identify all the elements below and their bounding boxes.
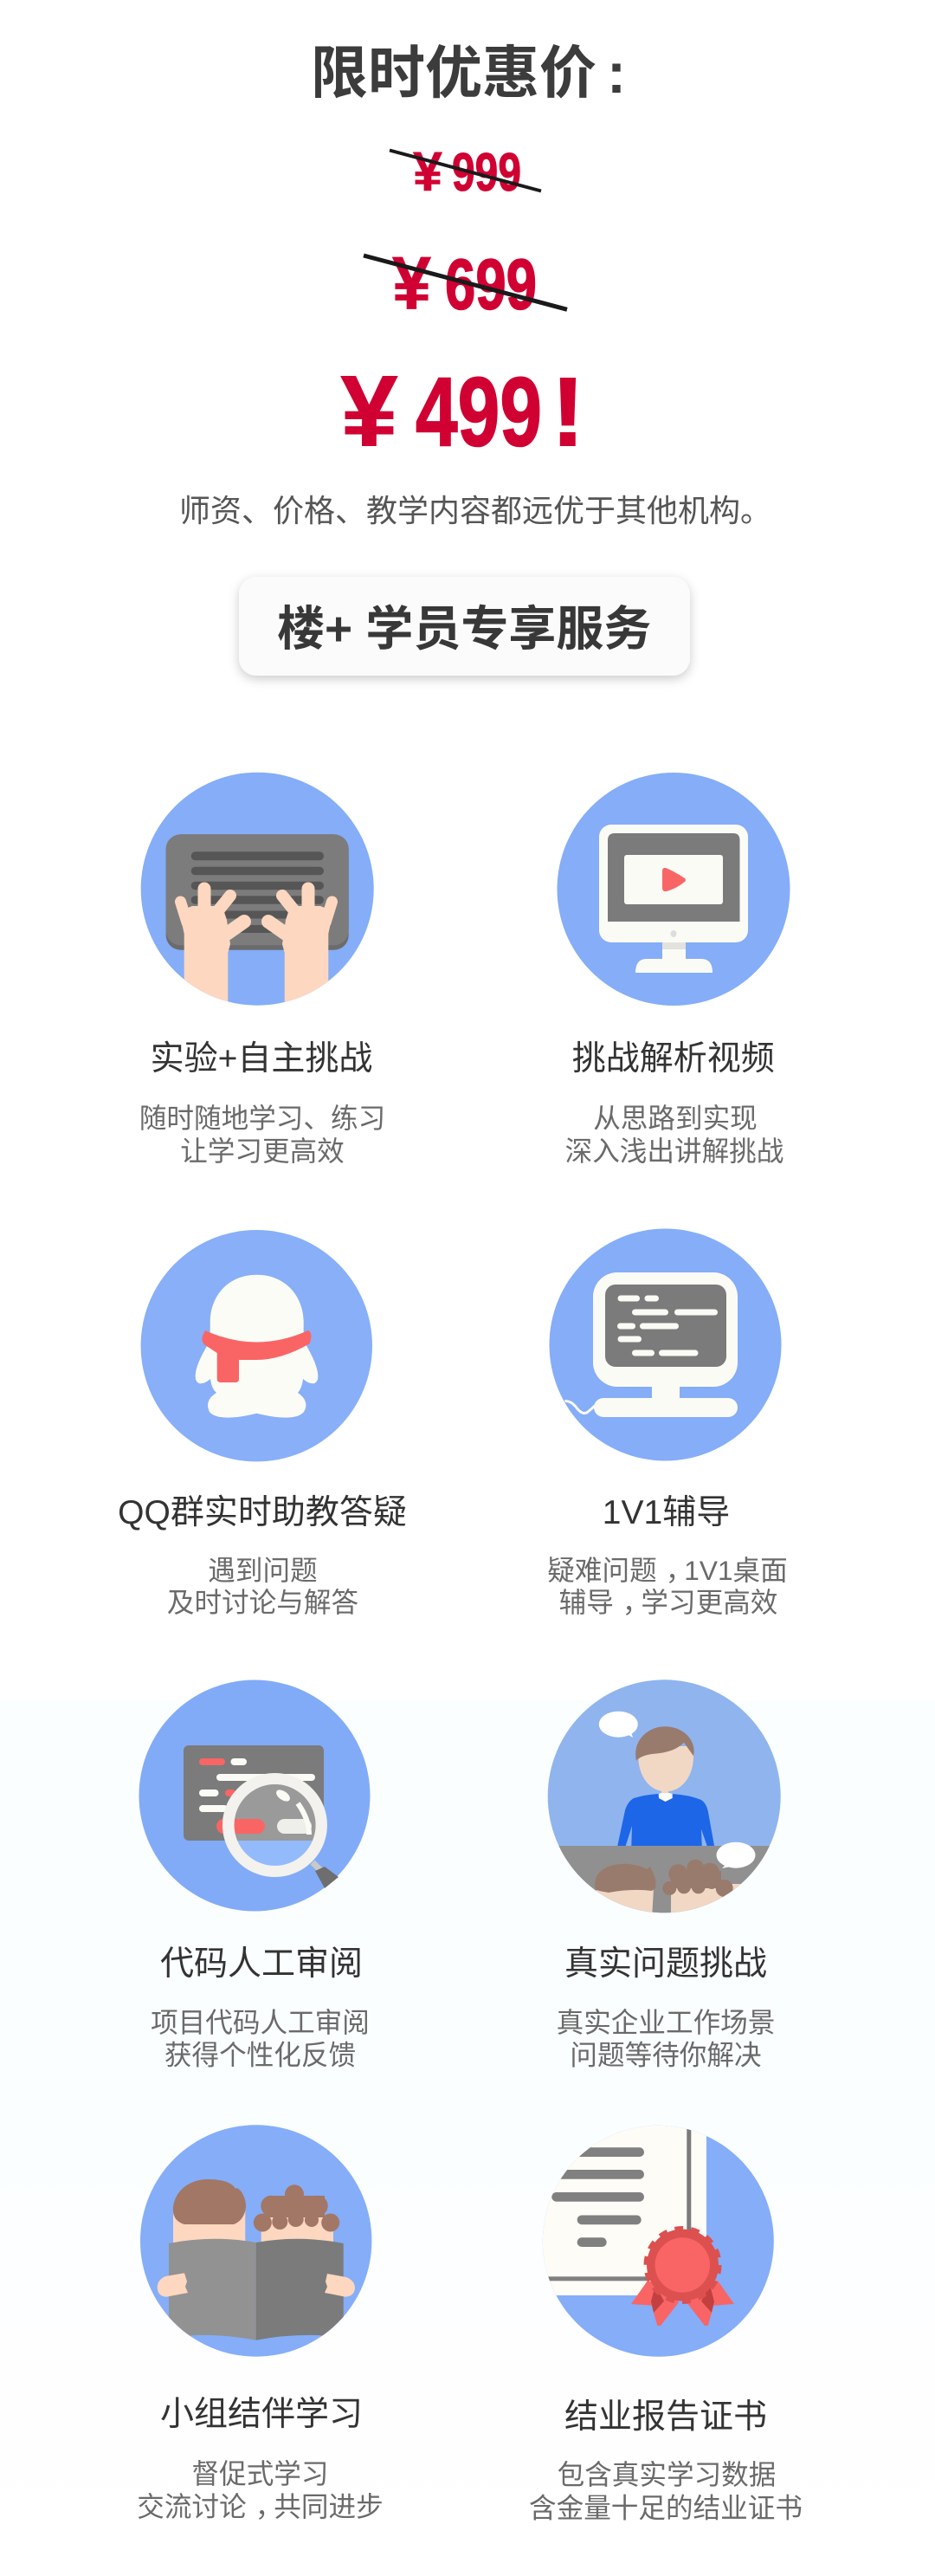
description: 深入浅出讲解挑战 bbox=[565, 1136, 783, 1167]
icon: monitor with play button bbox=[558, 773, 790, 1006]
panel: 挑战解析视频 bbox=[558, 773, 790, 1167]
current price 499: ¥ bbox=[341, 354, 398, 467]
button: 学员专享服务: 楼+ 学员专享服务 bbox=[277, 602, 651, 656]
heading: 真实问题挑战 bbox=[564, 1945, 767, 1983]
description: 获得个性化反馈 bbox=[164, 2039, 356, 2070]
panel: 小组结伴学习 bbox=[137, 2125, 384, 2522]
panel: 结业报告证书 bbox=[529, 2113, 803, 2524]
heading: 结业报告证书 bbox=[564, 2398, 767, 2436]
panel: 真实问题挑战 bbox=[547, 1680, 781, 2068]
original price 999 struck through: ¥ bbox=[413, 140, 442, 203]
heading: QQ群实时助教答疑 bbox=[118, 1494, 407, 1531]
description: 及时讨论与解答 bbox=[167, 1587, 358, 1618]
heading: 挑战解析视频 bbox=[572, 1040, 775, 1078]
description: 问题等待你解决 bbox=[570, 2039, 762, 2070]
subtitle: 师资、价格、教学内容都远优于其他机构。 bbox=[179, 493, 771, 528]
icon: QQ penguin with scarf bbox=[141, 1230, 372, 1461]
second price 699 struck through: 699 bbox=[445, 244, 537, 325]
second price 699 struck through bbox=[364, 243, 567, 326]
icon: certificate with seal bbox=[532, 2113, 774, 2357]
description: 含金量十足的结业证书 bbox=[529, 2493, 803, 2524]
description: 疑难问题 ，1V1桌面 bbox=[547, 1555, 788, 1586]
description: 辅导 ，学习更高效 bbox=[559, 1587, 777, 1618]
original price 999 struck through: 999 bbox=[452, 143, 521, 203]
description: 遇到问题 bbox=[208, 1555, 318, 1586]
description: 包含真实学习数据 bbox=[558, 2459, 776, 2490]
current price 499: 499 bbox=[416, 357, 542, 466]
current price 499: ! bbox=[551, 357, 585, 466]
panel: 代码人工审阅 bbox=[139, 1680, 371, 2070]
panel: 实验+自主挑战 bbox=[139, 773, 385, 1167]
button: 学员专享服务 bbox=[239, 577, 690, 676]
icon: person speaking to audience bbox=[547, 1680, 781, 1913]
description: 督促式学习 bbox=[192, 2458, 328, 2489]
panel: QQ群实时助教答疑 bbox=[118, 1230, 407, 1618]
title: 限时优惠价: bbox=[311, 41, 626, 105]
icon: two people reading bbox=[140, 2125, 371, 2357]
original price 999 struck through bbox=[390, 140, 541, 203]
heading: 小组结伴学习 bbox=[160, 2396, 363, 2433]
icon: hands on keyboard bbox=[141, 773, 374, 1018]
heading: 1V1辅导 bbox=[603, 1494, 730, 1531]
icon: code under magnifier bbox=[139, 1680, 371, 1911]
current price 499 bbox=[341, 354, 585, 467]
second price 699 struck through: ¥ bbox=[392, 243, 431, 326]
heading: 代码人工审阅 bbox=[160, 1945, 363, 1983]
description: 从思路到实现 bbox=[593, 1103, 758, 1134]
description: 随时随地学习、练习 bbox=[139, 1103, 385, 1134]
icon: computer with code bbox=[549, 1228, 781, 1460]
description: 真实企业工作场景 bbox=[557, 2007, 775, 2038]
heading: 实验+自主挑战 bbox=[151, 1040, 372, 1078]
description: 项目代码人工审阅 bbox=[151, 2007, 370, 2038]
description: 交流讨论 ，共同进步 bbox=[137, 2491, 384, 2522]
description: 让学习更高效 bbox=[180, 1136, 345, 1167]
panel: 1V1辅导 bbox=[547, 1228, 788, 1618]
